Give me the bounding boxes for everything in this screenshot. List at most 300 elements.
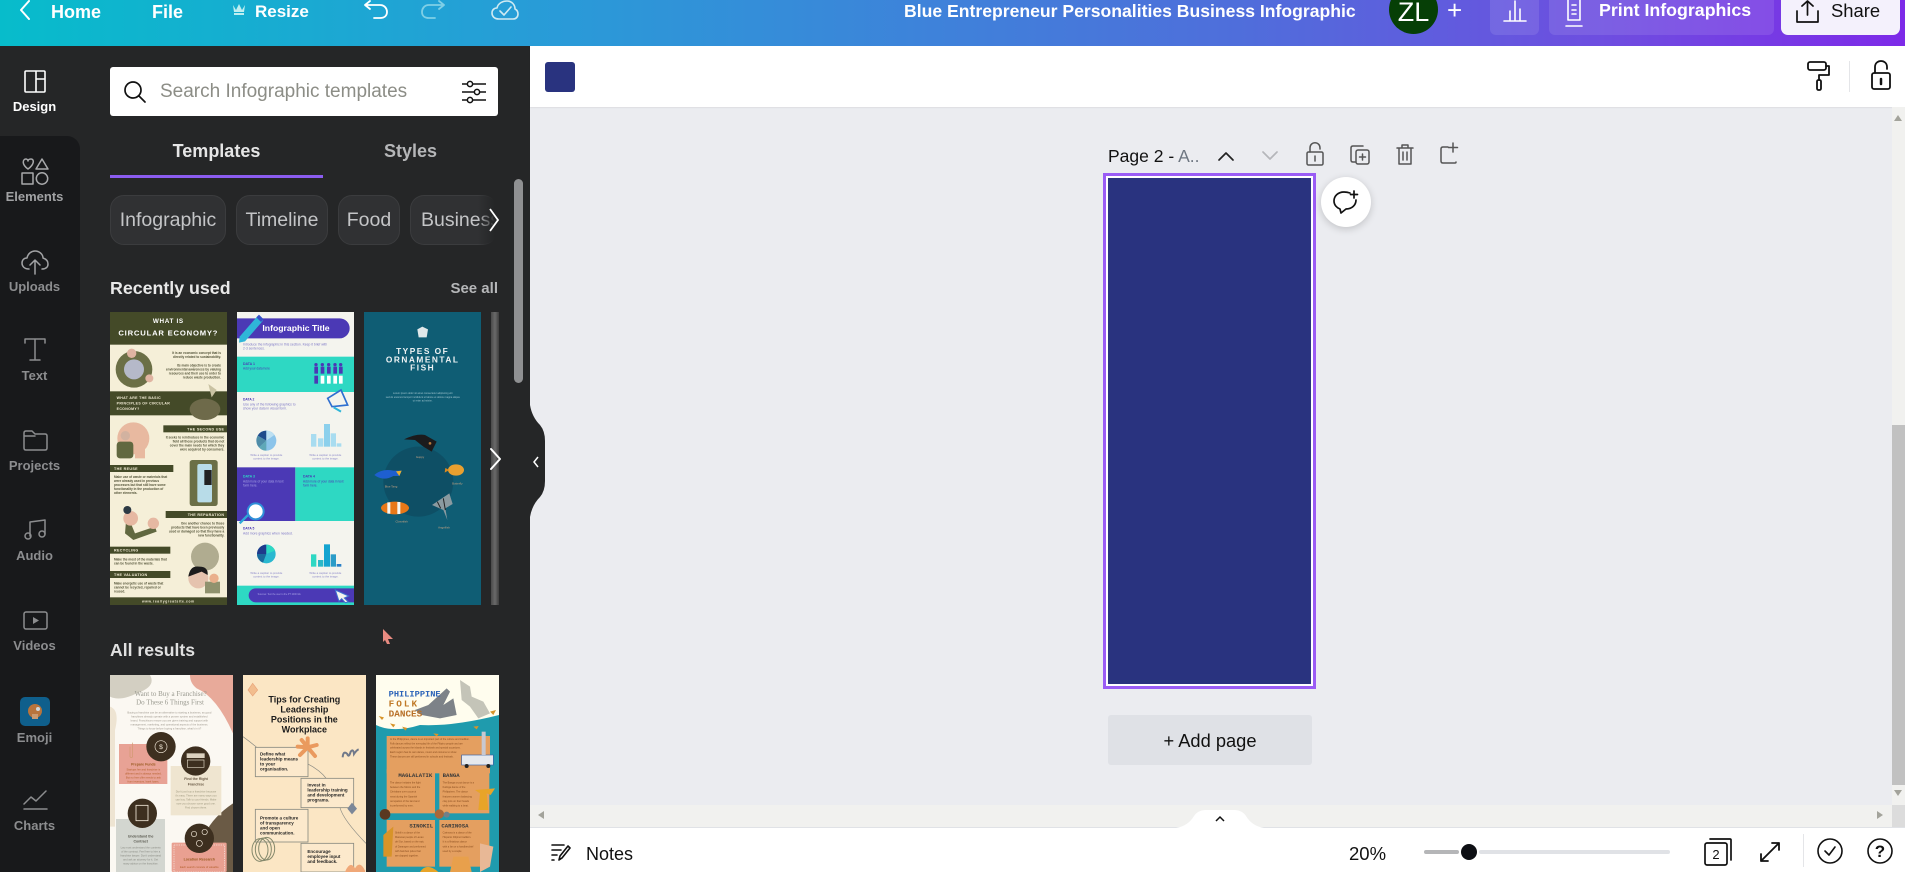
icon: crown — [233, 4, 245, 15]
icon: saved cloud — [491, 0, 519, 20]
template: franchise — [110, 675, 233, 872]
intro text — [243, 342, 327, 350]
card: prepare funds: from investors, bank loans. — [127, 780, 159, 784]
icon: upload cloud — [21, 250, 49, 275]
data 5 text: DATA 5 — [243, 527, 255, 531]
card: carinosa: Hispanic Filipino tradition. — [443, 836, 471, 839]
card: understand the contract: Understand the — [128, 834, 154, 838]
card: maglalatik — [387, 769, 435, 813]
captions 2 — [250, 571, 342, 579]
cursor — [383, 629, 393, 644]
icon: pencil — [239, 315, 264, 343]
folk title: PHILIPPINE — [389, 690, 441, 700]
card: sinakil — [387, 820, 435, 867]
card: find the franchise: Find chosen there. — [185, 806, 207, 810]
page count icon: 2 — [1712, 847, 1720, 862]
side panel background — [0, 46, 530, 872]
captions: Write a caption to provide — [250, 453, 283, 457]
card: banga: Kalinga dance of the — [443, 786, 466, 789]
icon: down chevron — [1261, 150, 1279, 162]
squiggle — [343, 749, 359, 757]
template: philippine folk dances — [376, 675, 499, 872]
the reparation: used or damaged so that they have a — [169, 529, 225, 533]
recycling: Make the most of the materials that — [114, 557, 168, 561]
sidebar item: Text — [22, 338, 48, 383]
data 3 panel: form here. — [243, 483, 258, 487]
page title: Page 2 - A.. — [1108, 146, 1199, 166]
coconut — [380, 809, 450, 820]
label: Videos: Videos — [13, 638, 56, 653]
data 1 band: Add your data here — [243, 366, 270, 370]
fish label: guppy: Guppy — [416, 455, 425, 459]
badge: contract — [128, 799, 157, 828]
button: print infographics — [1549, 0, 1774, 35]
bottle illustration — [190, 460, 218, 506]
tip 3: Promote a culture — [260, 815, 299, 820]
fish title: ORNAMENTAL — [386, 354, 459, 364]
print label: Print Infographics — [1599, 0, 1751, 20]
card: find the franchise: Don't just buy a franchise because — [176, 790, 217, 794]
tip 1: leadership means — [260, 757, 299, 762]
card: carinosa — [439, 820, 489, 867]
tip 2: programs. — [307, 798, 329, 803]
intro card: Folk dances reflect the everyday life of the Filipino people and are — [390, 742, 463, 745]
person illustration — [117, 422, 149, 458]
share label: Share — [1831, 0, 1880, 21]
sidebar rail — [0, 136, 80, 872]
card: maglalatik: occupation of the land and — [390, 800, 420, 803]
label: Elements: Elements — [6, 189, 63, 204]
title: Want to Buy a Franchise? — [135, 690, 207, 698]
card: location research — [172, 843, 227, 872]
data 3 panel: Add more of your data in text — [243, 479, 284, 483]
connecting lines — [243, 737, 366, 843]
fish: angelfish — [432, 493, 453, 520]
yellow dress — [475, 788, 495, 810]
tab: Templates: Templates — [173, 141, 260, 161]
icon: expand — [1759, 841, 1781, 863]
data 2 text — [243, 398, 296, 410]
data 2 text: show your data in visual form. — [243, 406, 287, 410]
map — [460, 680, 490, 718]
leadership title: Positions in the — [271, 715, 338, 725]
recycling — [110, 547, 170, 565]
colour swatch — [545, 62, 575, 92]
second use: It seeks to reintroduce in the economic — [166, 435, 225, 439]
chip: Infographic: Infographic — [120, 209, 216, 231]
captions: Write a caption to provide — [309, 453, 342, 457]
card: maglalatik: MAGLALATIK — [398, 772, 433, 779]
intro text: environmental awareness by valuing — [166, 367, 221, 371]
question band — [110, 384, 227, 420]
card: maglalatik: meat during the Spanish — [390, 795, 418, 798]
nav: File: File — [152, 2, 183, 22]
intro: Things to know before buying a franchise, what's in it? — [137, 726, 202, 730]
intro: brand. Franchisors ensure you are given training and support with — [131, 718, 209, 722]
card: find the franchise: can buy. Talk to your friends. Make — [176, 798, 217, 802]
active tab underline — [110, 175, 323, 178]
intro text: directly related to sustainability. — [173, 355, 221, 359]
the reparation: new functionality. — [198, 533, 224, 537]
folk title — [389, 690, 441, 719]
the valuation: Make energetic use of waste that — [114, 582, 164, 586]
page header — [1108, 142, 1468, 170]
intro: franchises already operate with a proven system and established — [131, 714, 208, 718]
header band: CIRCULAR ECONOMY? — [118, 328, 218, 337]
icon: magnifier — [240, 503, 264, 523]
captions 2: Write a caption to provide — [309, 571, 342, 575]
description text: sed do eiusmod tempor incididunt ut labore et dolore magna aliqua — [386, 396, 460, 399]
tab: Styles: Styles — [384, 141, 437, 161]
toolbar — [530, 46, 1905, 107]
card: carinosa: CARINOSA — [441, 822, 469, 829]
fish label: butterfly: Butterfly — [452, 481, 463, 485]
corner square — [1892, 805, 1905, 827]
folk title: FOLK — [389, 699, 419, 710]
card: carinosa: with a fan or a handkerchief — [443, 845, 474, 848]
the reparation: THE REPARATION — [188, 513, 224, 517]
heading: Recently used: Recently used — [110, 278, 231, 298]
captions 2: context to the image. — [253, 575, 280, 579]
pie chart — [256, 431, 276, 451]
jeepney — [462, 732, 493, 768]
tip 3 — [255, 809, 308, 842]
document title: Blue Entrepreneur Personalities Business Infographic — [904, 1, 1356, 21]
intro card: Each region has its own dance, music and costume to show. — [390, 751, 457, 754]
zoom slider — [1424, 842, 1670, 862]
label: Text: Text — [22, 368, 47, 383]
icon: next arrow — [490, 448, 501, 470]
second use: cover the main needs for which they — [170, 443, 225, 447]
icon: turtle — [417, 327, 428, 337]
captions: context to the image. — [253, 457, 280, 461]
card: banga: features women balancing — [443, 795, 472, 798]
card: understand the contract — [116, 819, 165, 872]
recycling: RECYCLING — [114, 549, 139, 553]
template: circular economy — [110, 312, 227, 605]
header band: WHAT IS — [153, 318, 184, 325]
sidebar item: Uploads — [9, 250, 60, 294]
card: banga: while walking to a beat. — [443, 805, 469, 808]
data 5 text: Add more graphics when needed. — [243, 532, 293, 536]
tip 2 — [301, 778, 354, 808]
tip 4: and feedback. — [307, 859, 337, 864]
intro: management, marketing, and operational aspects of the business. — [130, 722, 208, 726]
icon: add comment — [1333, 190, 1360, 216]
label: Projects: Projects — [9, 458, 60, 473]
intro text: resources and their use to order to — [169, 371, 221, 375]
divider — [1803, 834, 1804, 867]
left arrow — [538, 811, 544, 819]
icon: text T — [24, 338, 46, 361]
leadership title: Tips for Creating — [268, 695, 340, 705]
tip 2: and development — [307, 793, 345, 798]
the reuse: functionality in the production of — [114, 487, 164, 491]
fish: blue tang — [374, 470, 402, 479]
data 2 text: Use any of the following graphics to — [243, 402, 296, 406]
icon: redo — [421, 0, 445, 19]
tip 3: and open — [260, 825, 280, 830]
tip 3: communication. — [260, 830, 295, 835]
bottom panel notch — [1176, 810, 1264, 828]
intro text: Introduce the infographic in this section. Keep it brief with — [243, 342, 327, 346]
intro: Buying a franchise can be an alternative to starting a business, as good — [127, 710, 212, 714]
tip 2: leadership training — [307, 788, 348, 793]
icon: design layout — [24, 70, 46, 93]
card: carinosa: used by a couple — [443, 850, 462, 853]
pie chart 2 — [257, 545, 276, 563]
back chevron — [20, 0, 30, 20]
top bar — [0, 0, 1905, 46]
tip 4: Encourage — [307, 849, 331, 854]
label: Audio: Audio — [16, 548, 53, 563]
icon: music note — [24, 519, 46, 540]
card: find the franchise: Franchise — [188, 782, 204, 786]
tip 1: Define what — [260, 752, 286, 757]
icon: video — [23, 611, 48, 630]
card: find the franchise: Find the Right — [184, 777, 209, 781]
recycling: can be found in the waste. — [114, 561, 154, 565]
data 4 panel: Add more of your data in text — [303, 479, 344, 483]
card: understand the contract: many advice on the franchise. — [123, 862, 159, 866]
people pictogram — [314, 363, 343, 384]
card: banga — [439, 769, 489, 813]
footer band — [110, 597, 227, 605]
tip 1 — [255, 747, 308, 777]
leadership title: Leadership — [280, 705, 329, 715]
link: See all: See all — [450, 280, 498, 297]
bar chart 2 — [311, 544, 341, 567]
template: partial next thumbnail — [491, 312, 499, 605]
chip: Food: Food — [347, 209, 391, 231]
card: understand the contract: Contract — [133, 840, 149, 844]
intro card: celebrated across the islands in festivals and special occasions. — [390, 747, 461, 750]
sidebar item: Projects — [9, 430, 60, 473]
icon: emoji app — [20, 697, 50, 726]
icon: undo — [364, 0, 388, 19]
title — [135, 690, 207, 707]
icon: duplicate — [1350, 144, 1370, 166]
the valuation: cannot be recycled, repaired or — [114, 586, 162, 590]
add page button: + Add page — [1163, 730, 1257, 751]
badge: dollar: $ — [159, 744, 163, 751]
panel collapse handle — [530, 405, 545, 517]
card: sinakil: Sinkil is a dance of the — [395, 831, 421, 834]
card: carinosa: It is a flirtatious dance — [443, 841, 467, 844]
tip 1: to your — [260, 762, 275, 767]
icon: search — [124, 81, 146, 103]
down arrow — [1894, 790, 1902, 796]
title pill — [237, 318, 350, 338]
right arrow — [1877, 811, 1883, 819]
chip: Infographic — [110, 195, 226, 245]
dancers — [415, 688, 457, 718]
intro text: Its main objective is to create — [177, 364, 221, 368]
search box — [110, 67, 498, 116]
card: maglalatik: is performed by men. — [390, 805, 414, 808]
card: banga: clay pots on their heads — [443, 800, 470, 803]
fish title: FISH — [410, 363, 435, 373]
data 4 panel: DATA 4 — [303, 475, 315, 479]
dark circle — [383, 447, 453, 517]
vertical scrollbar — [1892, 107, 1905, 827]
title: Do These 6 Things First — [136, 699, 204, 707]
button: insights — [1490, 0, 1539, 35]
the valuation: reused. — [114, 590, 125, 594]
horizontal scrollbar — [530, 805, 1905, 827]
footer — [237, 586, 354, 605]
card: prepare funds: Startups fee and franchise is — [126, 768, 161, 772]
icon: help circle: ? — [1875, 842, 1885, 861]
card: sinakil: SINOKIL — [409, 822, 434, 829]
tip 4: employee input — [307, 854, 341, 859]
card: prepare funds — [119, 744, 167, 784]
captions 2: Write a caption to provide — [250, 571, 283, 575]
the reparation: One another chance to those — [181, 521, 225, 525]
card: carinosa: Carinosa is a dance of the — [443, 831, 472, 834]
comment button — [1321, 177, 1371, 227]
description text — [386, 392, 460, 403]
chip: Business — [410, 195, 497, 245]
card: sinakil: are clapped together. — [395, 855, 419, 858]
heading: All results: All results — [110, 640, 195, 660]
slider filled — [1424, 850, 1459, 854]
intro text: reduce waste production. — [183, 375, 221, 379]
icon: cursor — [335, 590, 349, 603]
tip 2: Invest in — [307, 783, 326, 788]
icon: add page — [1440, 142, 1460, 165]
fish title: TYPES OF — [396, 346, 449, 356]
the reparation — [166, 511, 227, 537]
intro text — [166, 351, 221, 379]
notes label: Notes — [586, 844, 633, 864]
page count icon — [1704, 838, 1732, 866]
second use: were acquired by consumers. — [179, 447, 224, 451]
label: Charts: Charts — [14, 818, 55, 833]
slider track — [1479, 850, 1670, 854]
icon: unlocked padlock — [1871, 60, 1891, 90]
fish: butterfly — [445, 464, 464, 476]
intro card: In the Philippines, dance is an important part of the culture and tradition. — [390, 738, 470, 741]
add page button — [1108, 715, 1312, 765]
data 4 panel — [295, 467, 354, 521]
badge: dollar — [146, 732, 176, 761]
intro card: These dances are still performed in schools and festivals. — [390, 755, 454, 758]
coil — [252, 837, 275, 861]
icon: printer — [1565, 0, 1583, 27]
up arrow — [1894, 115, 1902, 121]
chip: Timeline — [236, 195, 328, 245]
tip 1: organisation. — [260, 767, 288, 772]
question band: PRINCIPLES OF CIRCULAR — [117, 402, 170, 406]
zoom percent: 20% — [1349, 843, 1386, 864]
data 1 band: DATA 1 — [243, 362, 255, 366]
diamond peach — [248, 683, 258, 696]
template: leadership tips — [243, 675, 366, 872]
avatar: ZL — [1389, 0, 1438, 34]
icon: elements shapes — [21, 158, 49, 185]
card: prepare funds: But no free offer needs to ask — [126, 776, 161, 780]
card: maglalatik: between the Moros and the — [390, 786, 421, 789]
card: understand the contract: franchise lawyer. Don't understand — [120, 854, 162, 858]
icon: trash — [1396, 143, 1414, 165]
sidebar item: Videos — [13, 611, 56, 653]
card: sinakil: of Darangen and performed — [395, 845, 426, 848]
icon: up chevron — [1217, 150, 1235, 162]
question band: WHAT ARE THE BASIC — [117, 396, 161, 400]
intro text: It is an economic concept that is — [172, 351, 221, 355]
icon: check circle — [1817, 838, 1843, 864]
badge: shop — [181, 746, 210, 776]
search placeholder: Search Infographic templates — [160, 81, 407, 102]
card: understand the contract: Lay must understand the contents — [121, 846, 161, 850]
bottom flower — [345, 865, 365, 872]
button: share — [1781, 0, 1900, 35]
tip 3: of transparency — [260, 820, 294, 825]
icon: bar chart — [1503, 0, 1527, 22]
template: ornamental fish — [364, 312, 481, 605]
the reparation: products that have been previously — [171, 525, 225, 529]
description text: Lorem ipsum dolor sit amet consectetur adipiscing elit — [393, 392, 453, 395]
fish: clownfish — [381, 502, 409, 514]
leadership title: Workplace — [282, 725, 327, 735]
scrollbar thumb — [1892, 425, 1905, 785]
card: find the franchise: sure you choose some good one. — [176, 802, 216, 806]
bar chart — [311, 424, 341, 447]
the reuse: other elements. — [114, 491, 137, 495]
chip: Food — [338, 195, 400, 245]
data 1 band — [237, 357, 354, 392]
card: understand the contract: of the contract. Feel free to hire a — [121, 850, 161, 854]
data 4 panel: form here. — [303, 483, 318, 487]
intro text: 2-3 sentences. — [243, 346, 265, 350]
captions — [250, 453, 342, 461]
label: Emoji: Emoji — [17, 730, 52, 745]
captions: context to the image. — [312, 457, 339, 461]
chip: Timeline: Timeline — [246, 209, 318, 231]
header band — [110, 312, 227, 345]
sidebar item: Charts — [14, 790, 55, 833]
icon: share — [1796, 0, 1819, 23]
second use — [163, 425, 227, 451]
sidebar item: Audio — [16, 519, 53, 563]
tip 4 — [301, 843, 354, 872]
sidebar item: Emoji — [17, 697, 52, 745]
icon: help circle — [1867, 838, 1893, 864]
bottom bar — [530, 827, 1905, 872]
leadership title — [268, 695, 340, 735]
second use: THE SECOND USE — [187, 427, 225, 431]
fish label: clownfish: Clownfish — [396, 520, 408, 524]
card: banga: The Banga or pot dance is a — [443, 781, 475, 784]
icon: line chart — [23, 790, 48, 810]
footer band: www.reallygreatsite.com — [141, 599, 195, 603]
nav: Home: Home — [51, 2, 101, 22]
design page selection outline — [1103, 173, 1316, 689]
the reuse: processes but that still have some — [114, 483, 166, 487]
data 2 text: DATA 2 — [243, 398, 255, 402]
card: prepare funds: Prepare Funds — [131, 762, 156, 766]
fish title — [386, 346, 459, 373]
data 3 panel: DATA 3 — [243, 475, 255, 479]
fish label: blue tang: Blue Tang — [385, 485, 398, 489]
icon: filter sliders — [462, 80, 486, 104]
template: infographic title — [237, 312, 354, 605]
data 5 text — [243, 527, 293, 536]
fish: guppy — [404, 435, 437, 452]
teal wave — [376, 715, 499, 872]
card: location research: Location Research — [184, 858, 215, 862]
